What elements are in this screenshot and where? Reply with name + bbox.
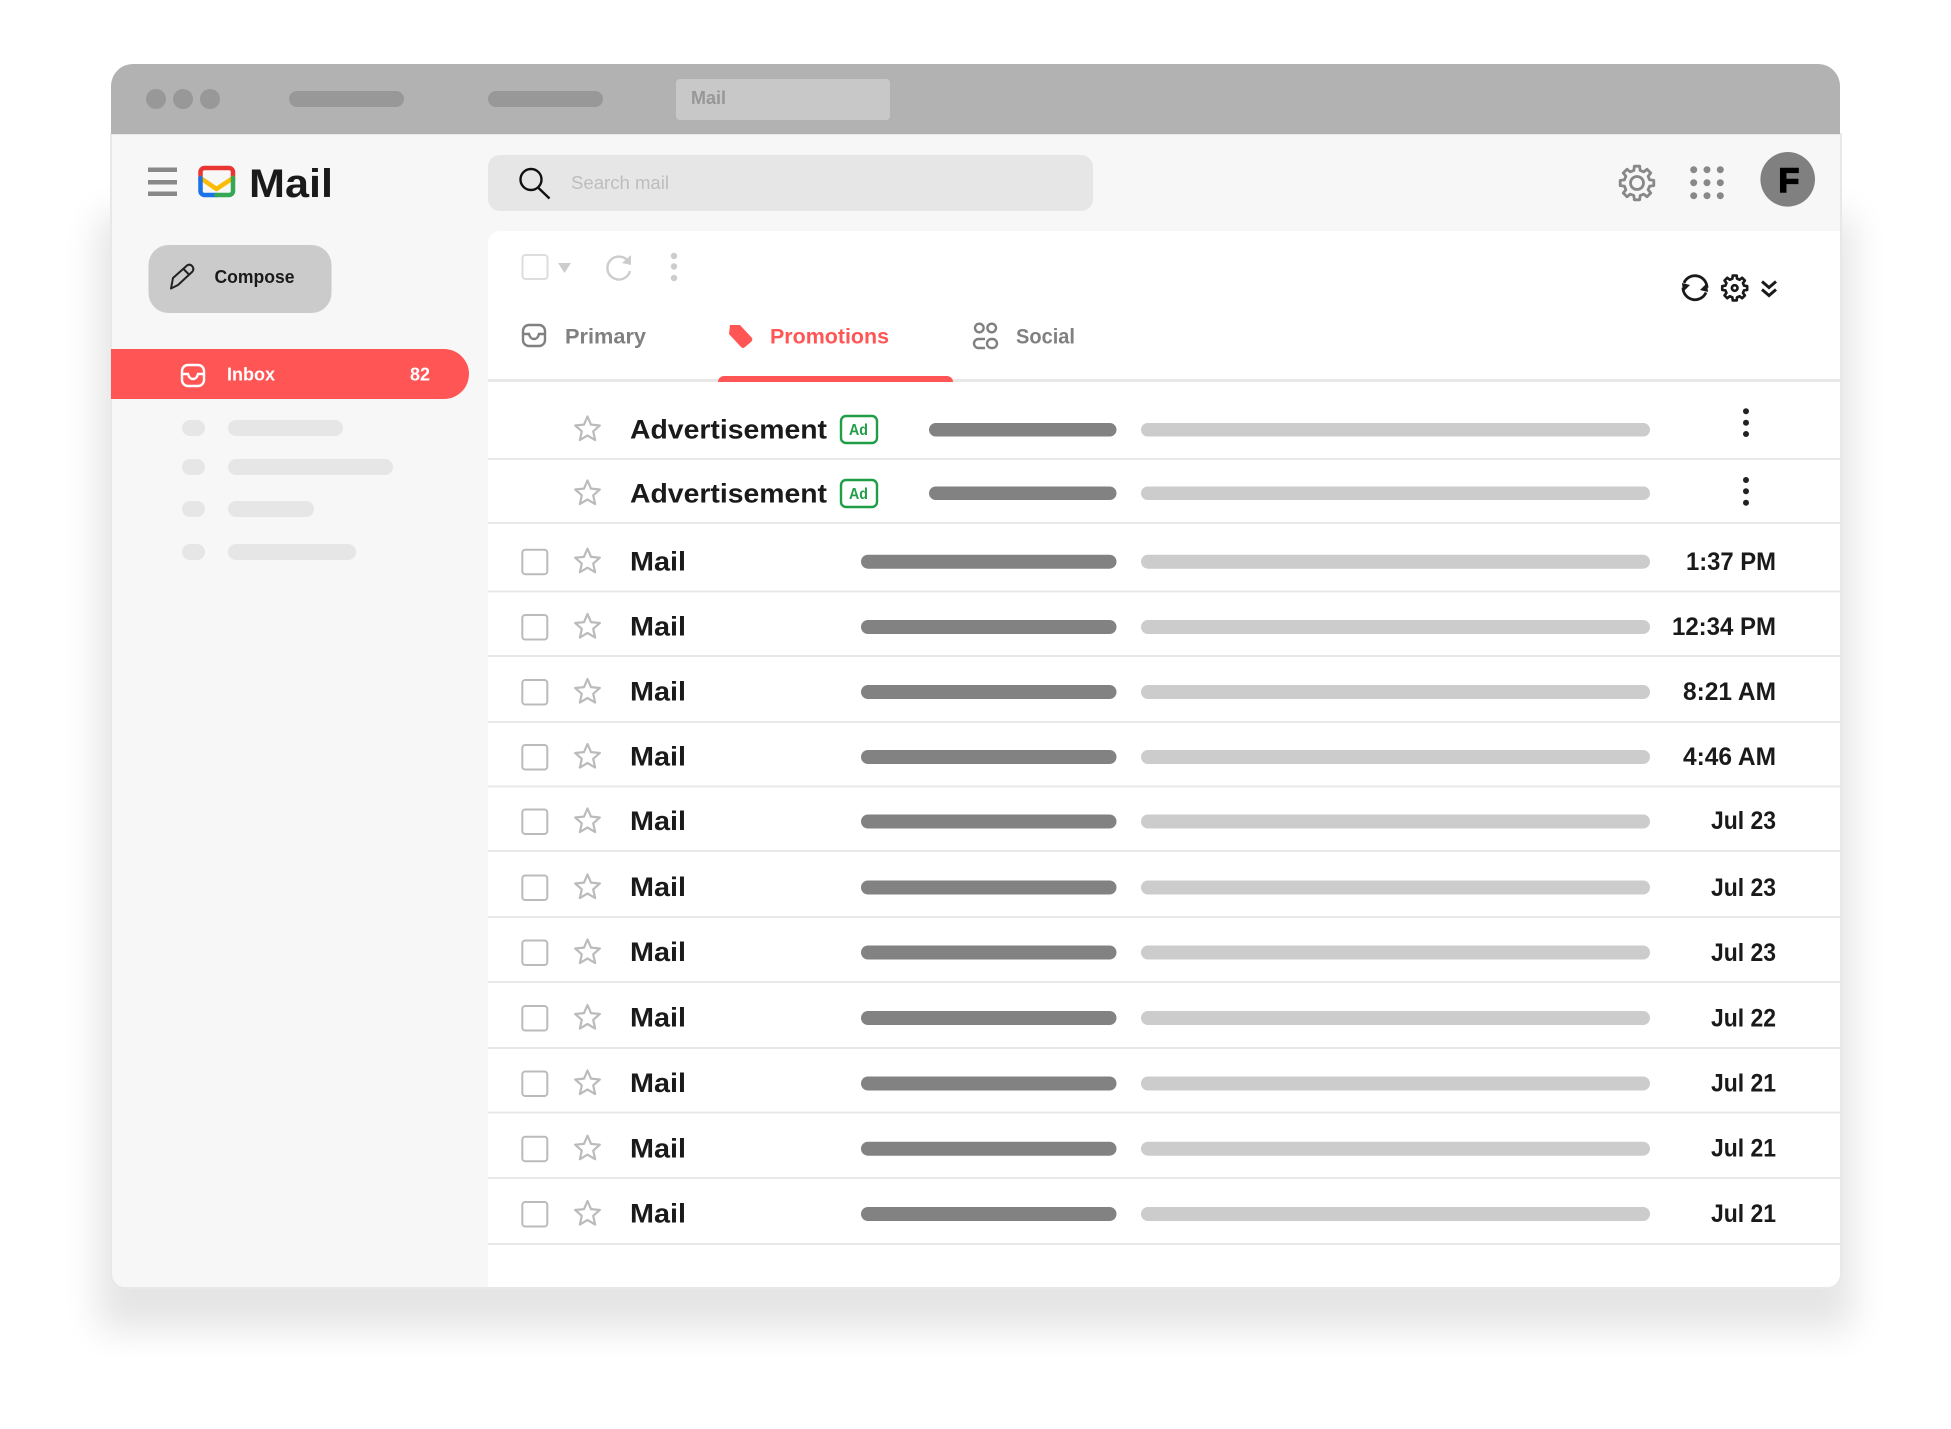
promotions label: Promotions [770,326,889,348]
active browser tab: Mail [691,88,726,108]
search placeholder: Search mail [571,173,669,193]
mail row 11 [522,1199,1776,1229]
tab: promotions [718,325,953,382]
more dots [671,253,677,281]
star [575,480,600,504]
mail row 6: Jul 23 [1711,874,1776,902]
sender: Advertisement [630,415,827,445]
toolbar [522,253,677,281]
tab: social [974,324,1075,348]
mail row 11: Jul 21 [1711,1200,1776,1228]
icon: apps grid [1690,166,1724,199]
icon: double chevron [1762,282,1776,296]
select-all checkbox [522,255,548,279]
mail row 10: Jul 21 [1711,1135,1776,1163]
mail row 4 [522,742,1776,772]
icon: settings gear [1620,166,1654,200]
mail row 3 [522,677,1776,707]
window control dots [146,89,220,109]
ad badge [841,416,877,443]
mail row 3: Mail [630,677,686,707]
mail row 7: Mail [630,937,686,967]
mail row 7 [522,937,1776,967]
window body [111,134,1841,1288]
more menu [1743,408,1749,437]
logo title: Mail [249,162,333,206]
mail row 5: Jul 23 [1711,807,1776,835]
mail row 1 [522,546,1776,576]
compose button [148,245,332,313]
mail row 2 [522,612,1776,642]
inbox count: 82 [410,364,430,384]
sender: Advertisement [630,478,827,508]
header divider [488,379,1840,382]
browser title bar [111,64,1840,134]
compose label: Compose [214,267,294,287]
mail row 1: Mail [630,546,686,576]
mail row 4: Mail [630,742,686,772]
inbox nav item [111,349,469,399]
icon: sync [1682,276,1708,300]
preview bar [1141,486,1650,500]
primary label: Primary [565,326,646,348]
mail row 5: Mail [630,806,686,836]
icon: people [974,324,997,348]
active browser tab [676,79,890,120]
ad badge [841,480,877,507]
mail row 2: 12:34 PM [1672,613,1776,641]
main mail panel [488,231,1840,1287]
icon: small gear [1722,276,1747,300]
icon: primary tray [523,325,545,346]
active tab underline [718,376,953,382]
mail row 9 [522,1068,1776,1098]
star [575,416,600,440]
mail row 9: Jul 21 [1711,1070,1776,1098]
ad row 1 [575,408,1749,445]
icon: mail logo [200,168,233,195]
window drop shadow [98,215,1853,1330]
sidebar placeholder items [182,420,393,560]
icon: hamburger menu [148,168,177,196]
social label: Social [1016,326,1075,348]
refresh arrow [622,255,631,265]
subject bar [929,423,1116,436]
row dividers [488,459,1840,1244]
icon: inbox tray [182,365,204,386]
search bar [488,155,1093,211]
more menu [1743,477,1749,506]
inbox label: Inbox [227,364,275,384]
ad badge: Ad [849,422,868,439]
icon: tag [729,325,752,348]
icon: pencil [171,265,193,288]
user avatar [1760,152,1815,207]
mail row 2: Mail [630,612,686,642]
mail row 9: Mail [630,1068,686,1098]
mail row 8 [522,1003,1776,1033]
mail row 6: Mail [630,872,686,902]
mail row 5 [522,806,1776,836]
mail row 8: Jul 22 [1711,1004,1776,1032]
subject bar [929,486,1116,500]
user avatar: F [1778,162,1799,200]
browser window [111,64,1841,1288]
mail row 10 [522,1133,1776,1163]
mail row 4: 4:46 AM [1683,743,1776,771]
ad-blocker icons [1682,276,1776,300]
mail row 7: Jul 23 [1711,939,1776,967]
tab: primary [523,325,646,348]
mail row 11: Mail [630,1199,686,1229]
preview bar [1141,423,1650,436]
dropdown arrow [558,263,571,273]
mail row 3: 8:21 AM [1683,678,1776,706]
mail row 10: Mail [630,1133,686,1163]
icon: magnifier [520,169,550,198]
placeholder tab 1 [289,91,404,107]
placeholder tab 2 [488,91,603,107]
mail row 6 [522,872,1776,902]
mail row 8: Mail [630,1003,686,1033]
icon: refresh [607,257,630,280]
ad row 2 [575,477,1749,508]
mail row 1: 1:37 PM [1686,548,1776,576]
ad badge: Ad [849,486,868,503]
